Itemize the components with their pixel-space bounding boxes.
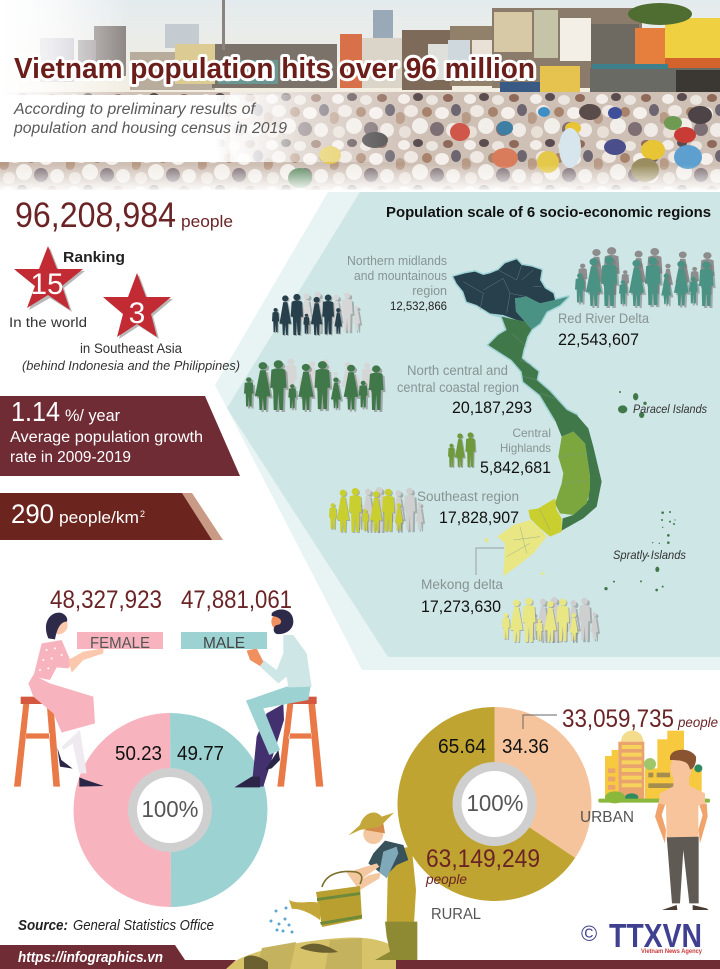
label: Mekong delta bbox=[421, 576, 503, 616]
field bbox=[225, 937, 396, 969]
people: Central Highlands bbox=[448, 432, 476, 468]
white band behind subtitle bbox=[0, 95, 300, 162]
pie: gender: 50.23 bbox=[115, 743, 162, 765]
pie: urban and rural bbox=[397, 707, 591, 901]
label: Spratly Islands: Spratly Islands bbox=[613, 548, 686, 562]
region: Red River Delta bbox=[515, 297, 568, 329]
label: Mekong delta: 17,273,630 bbox=[421, 598, 501, 616]
label: North central: 20,187,293 bbox=[452, 399, 532, 417]
region: Northern midlands and mountainous bbox=[453, 259, 555, 322]
urban number: 33,059,735 bbox=[562, 705, 674, 733]
map of Vietnam bbox=[453, 259, 676, 591]
map glow outline bbox=[453, 259, 577, 423]
star: rank 3: 3 bbox=[129, 297, 145, 330]
label: North central: central coastal region bbox=[397, 380, 519, 395]
people: North central bbox=[244, 359, 386, 412]
callout: density: 290 bbox=[11, 499, 54, 529]
leader: urban bbox=[523, 715, 557, 729]
source: General Statistics Office bbox=[73, 918, 214, 934]
region: North central and central coastal bbox=[488, 317, 602, 531]
label: Southeast bbox=[417, 489, 519, 527]
small islands bbox=[484, 538, 489, 544]
tag: male: MALE bbox=[203, 635, 245, 652]
label: Northern midlands: Northern midlands bbox=[347, 254, 447, 268]
callout: density: people/km bbox=[59, 509, 139, 527]
ranking heading: Ranking bbox=[63, 249, 125, 266]
star: rank 15: 15 bbox=[30, 268, 64, 301]
water drops bbox=[270, 906, 294, 934]
panel: regions hexagon bbox=[215, 192, 720, 670]
illustration: watering can bbox=[289, 871, 362, 927]
gender numbers bbox=[50, 586, 292, 614]
distant buildings bbox=[40, 0, 496, 90]
label: Northern midlands: 12,532,866 bbox=[390, 299, 447, 313]
heading: regions: Population scale of 6 socio-economic regions bbox=[386, 205, 711, 221]
Spratly islands bbox=[604, 511, 676, 591]
logo: TTXVN: Vietnam News Agency bbox=[641, 949, 703, 955]
tag: female: FEMALE bbox=[90, 635, 150, 652]
label: Southeast: Southeast region bbox=[417, 489, 519, 504]
illustration: farmer with watering can bbox=[347, 813, 417, 960]
pie: gender: 100% bbox=[142, 796, 198, 822]
bottom fade bbox=[0, 165, 720, 192]
subtitle: population and housing census in 2019 bbox=[13, 120, 287, 137]
pie: urban and rural: 100% bbox=[466, 790, 524, 816]
helmets bbox=[288, 104, 712, 188]
label: Red River Delta: 22,543,607 bbox=[558, 331, 639, 349]
haze over middle crowd bbox=[230, 92, 420, 162]
subtitle bbox=[13, 101, 287, 137]
urban number: people bbox=[677, 714, 718, 730]
total population: people bbox=[181, 213, 233, 231]
gender numbers: 48,327,923 bbox=[50, 586, 162, 614]
tag: female bbox=[77, 632, 163, 652]
pie: urban and rural: 65.64 bbox=[438, 736, 486, 758]
star: rank 3 bbox=[103, 273, 173, 339]
people: Northern midlands bbox=[272, 292, 362, 336]
callout: growth rate: Average population growth bbox=[10, 429, 203, 446]
illustration: urban man bbox=[655, 750, 709, 910]
label: Southeast: 17,828,907 bbox=[439, 509, 519, 527]
label: Mekong delta: Mekong delta bbox=[421, 576, 503, 592]
callout: growth rate: 1.14 bbox=[11, 396, 60, 427]
people: Southeast bbox=[329, 487, 425, 533]
label: Paracel Islands: Paracel Islands bbox=[633, 402, 707, 416]
label: Northern midlands bbox=[347, 254, 447, 313]
total population: 96,208,984 bbox=[15, 196, 176, 235]
rural number: 63,149,249 bbox=[426, 845, 540, 873]
label: Red River Delta: Red River Delta bbox=[558, 310, 649, 326]
sky bbox=[0, 0, 720, 100]
logo: TTXVN: TTXVN bbox=[609, 917, 702, 954]
source: Source: bbox=[18, 918, 68, 934]
people: Mekong delta bbox=[502, 597, 600, 643]
callout: density: 2 bbox=[140, 509, 145, 519]
label: Central Highlands bbox=[480, 426, 551, 477]
region: Southeast bbox=[528, 498, 562, 537]
label: Central Highlands: Highlands bbox=[500, 441, 551, 455]
label: Central Highlands: 5,842,681 bbox=[480, 459, 551, 477]
region: Central Highlands bbox=[555, 432, 590, 515]
caption: in Southeast Asia: (behind Indonesia and the Philippines) bbox=[22, 359, 240, 373]
star: rank 15 bbox=[14, 246, 85, 312]
label: Red River Delta bbox=[558, 310, 649, 349]
caption: in Southeast Asia: in Southeast Asia bbox=[80, 341, 182, 356]
illustration: man on stool bbox=[234, 610, 323, 787]
caption: in Southeast Asia bbox=[22, 341, 240, 373]
label: North central bbox=[397, 363, 532, 417]
crowd bbox=[0, 92, 720, 190]
rural number bbox=[425, 845, 540, 887]
source bbox=[18, 918, 214, 934]
illustration: woman on stool bbox=[14, 613, 104, 787]
pie: gender: 49.77 bbox=[177, 743, 224, 765]
pie: urban and rural: 34.36 bbox=[502, 736, 549, 758]
footer bar bbox=[0, 945, 720, 969]
pie: gender bbox=[74, 713, 267, 907]
people: Red River Delta bbox=[575, 247, 716, 308]
leader: Mekong delta bbox=[476, 548, 504, 575]
logo: TTXVN bbox=[581, 917, 703, 955]
gender numbers: 47,881,061 bbox=[181, 586, 292, 614]
callout: growth rate: %/ year bbox=[65, 407, 120, 425]
Paracel islands bbox=[618, 391, 647, 418]
callout: growth rate: rate in 2009-2019 bbox=[10, 449, 131, 466]
label: urban: URBAN bbox=[580, 809, 634, 826]
logo: TTXVN: © bbox=[581, 921, 597, 946]
shop houses with signs bbox=[492, 3, 720, 102]
label: rural: RURAL bbox=[431, 906, 481, 923]
label: Central Highlands: Central bbox=[512, 426, 551, 440]
subtitle: According to preliminary results of bbox=[13, 101, 257, 118]
top left haze bbox=[0, 0, 130, 96]
callout: density bbox=[0, 493, 223, 540]
callout: growth rate bbox=[0, 396, 240, 476]
label: North central: North central and bbox=[407, 363, 508, 378]
footer bar: https://infographics.vn bbox=[18, 949, 163, 966]
header photo: street crowd bbox=[0, 0, 720, 192]
illustration: city bbox=[598, 730, 710, 803]
label: Northern midlands: and mountainous bbox=[354, 269, 447, 283]
label: Northern midlands: region bbox=[412, 284, 447, 298]
caption: in the world: In the world bbox=[9, 315, 87, 330]
region: Mekong delta bbox=[497, 520, 547, 576]
tag: male bbox=[181, 632, 267, 652]
title: Vietnam population hits over 96 million bbox=[14, 53, 535, 85]
rural number: people bbox=[425, 871, 467, 887]
